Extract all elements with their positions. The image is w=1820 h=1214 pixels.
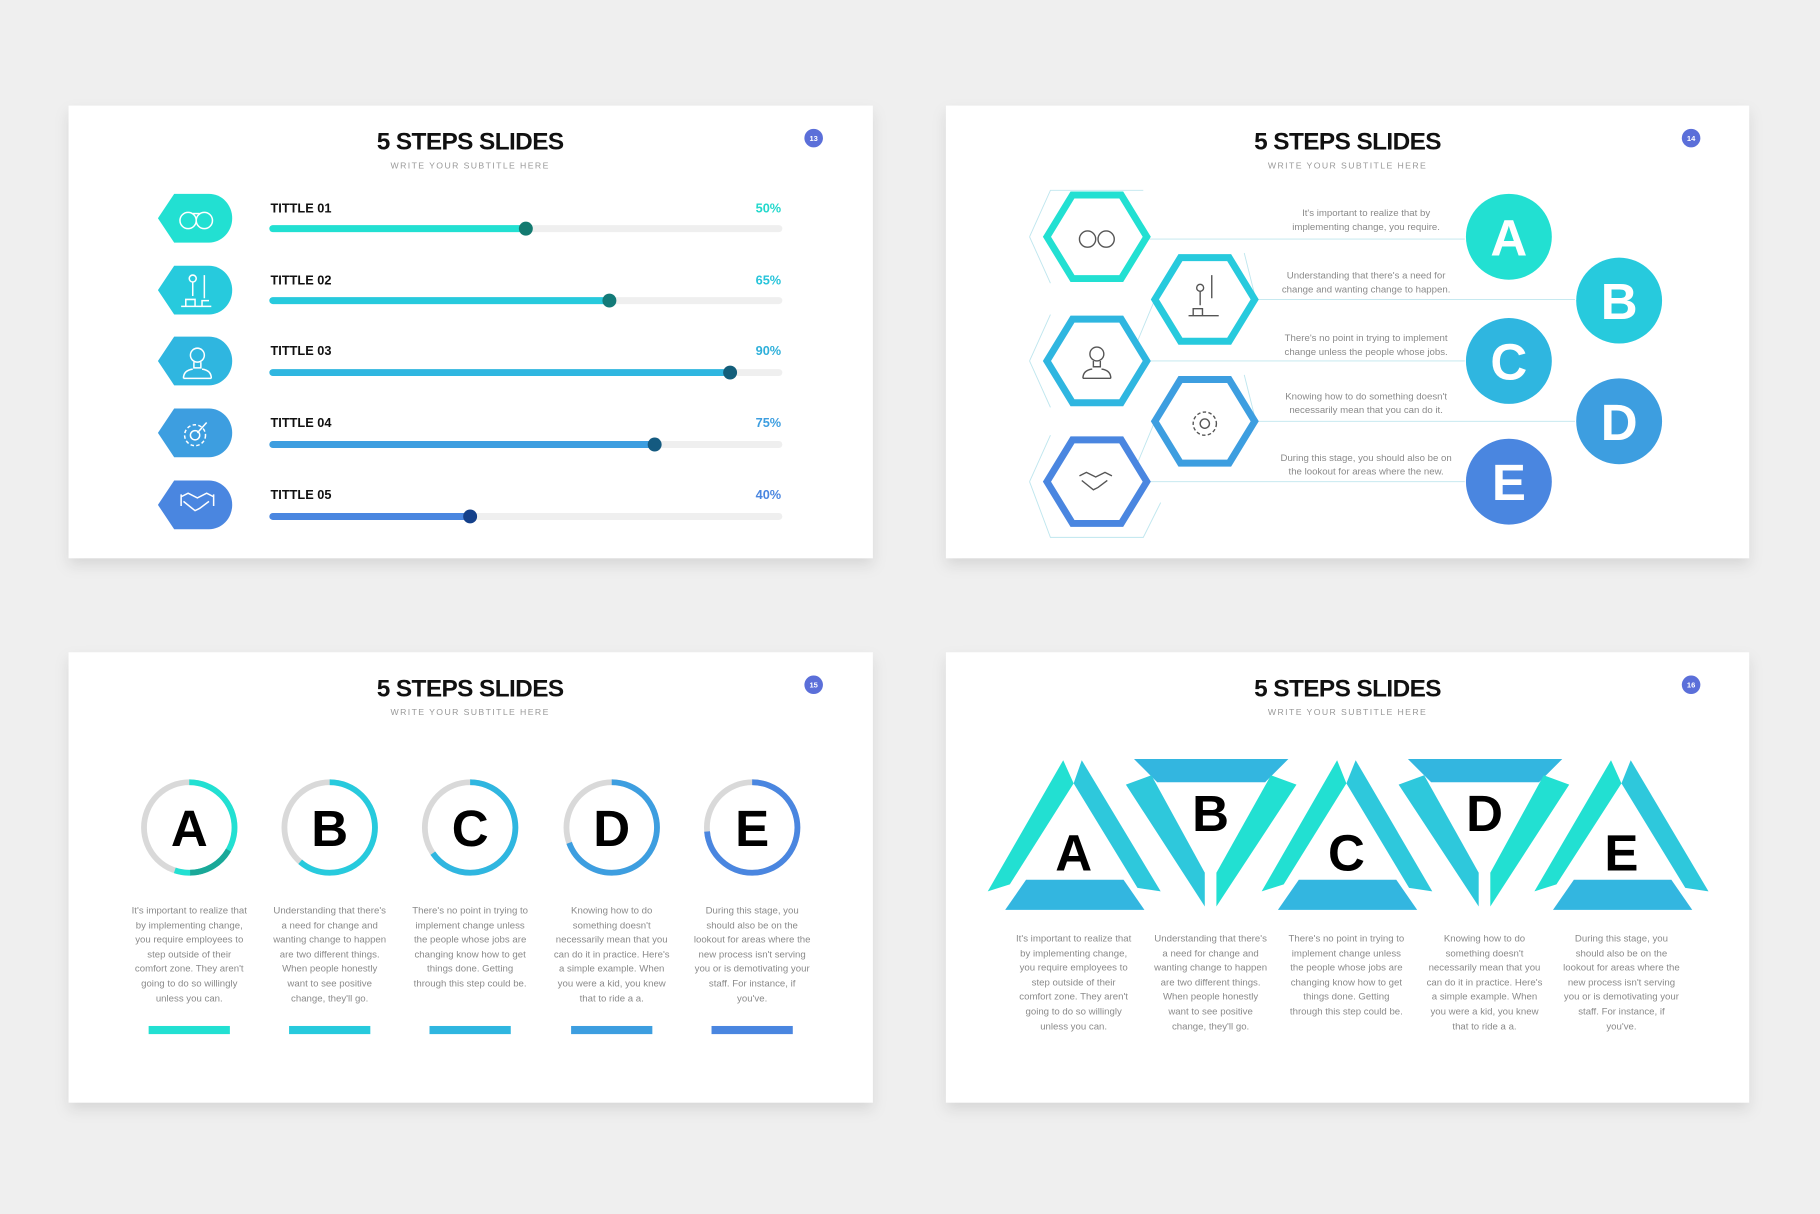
texts slide 15: changing know how to get bbox=[414, 950, 526, 961]
badge 14 bbox=[1682, 129, 1700, 147]
badge 15 bbox=[804, 675, 823, 694]
ring C: C bbox=[452, 800, 489, 857]
texts slide 15: a need for change and bbox=[282, 920, 378, 931]
row 2 bbox=[158, 266, 782, 315]
texts slide 16: going to do so willingly bbox=[1025, 1006, 1122, 1017]
texts slide 14: change unless the people whose jobs. bbox=[1285, 347, 1448, 358]
texts slide 15: you require employees to bbox=[135, 934, 243, 945]
texts slide 15: unless you can. bbox=[156, 994, 223, 1005]
texts slide 16: wanting change to happen bbox=[1153, 962, 1267, 973]
heading: slide 14: WRITE YOUR SUBTITLE HERE bbox=[1268, 160, 1427, 170]
heading: slide 16: 5 STEPS SLIDES bbox=[1254, 675, 1441, 702]
texts slide 15: When people honestly bbox=[282, 963, 378, 974]
triangle A bbox=[988, 760, 1161, 910]
texts slide 15: There's no point in trying to bbox=[412, 905, 528, 916]
row 2: TITTLE 02 bbox=[271, 272, 331, 287]
texts slide 14: necessarily mean that you can do it. bbox=[1289, 405, 1443, 416]
badge 14: 14 bbox=[1687, 134, 1696, 143]
texts slide 14: change and wanting change to happen. bbox=[1282, 284, 1450, 295]
texts slide 15: change, they'll go. bbox=[291, 994, 368, 1005]
row 1: 50% bbox=[756, 200, 781, 215]
texts slide 15: new process isn't serving bbox=[699, 950, 806, 961]
ring D bbox=[566, 782, 657, 873]
heading: slide 13 bbox=[377, 129, 564, 170]
triangle D: D bbox=[1466, 785, 1503, 842]
texts slide 16: things done. Getting bbox=[1303, 991, 1389, 1002]
texts slide 16: you require employees to bbox=[1020, 962, 1128, 973]
texts slide 16: that to ride a a. bbox=[1452, 1021, 1517, 1032]
texts slide 16: changing know how to get bbox=[1291, 977, 1402, 988]
badge 16 bbox=[1682, 675, 1700, 694]
hexagon D bbox=[1155, 380, 1255, 463]
texts slide 15: the people whose jobs are bbox=[414, 934, 526, 945]
ring E bbox=[707, 782, 797, 873]
texts slide 16: During this stage, you bbox=[1575, 933, 1668, 944]
texts slide 14 bbox=[1281, 208, 1452, 478]
texts slide 16: Understanding that there's bbox=[1154, 933, 1267, 944]
triangle A: A bbox=[1055, 824, 1092, 881]
texts slide 15: you were a kid, you knew bbox=[558, 979, 666, 990]
texts slide 14: There's no point in trying to implement bbox=[1285, 333, 1448, 344]
heading: slide 13: WRITE YOUR SUBTITLE HERE bbox=[391, 160, 550, 170]
texts slide 16 bbox=[1016, 933, 1680, 1032]
texts slide 16: want to see positive bbox=[1167, 1006, 1253, 1017]
row 2: 65% bbox=[756, 272, 781, 287]
row 3: 90% bbox=[756, 343, 781, 358]
texts slide 14: During this stage, you should also be on bbox=[1281, 453, 1452, 464]
letter circles: A bbox=[1490, 209, 1527, 266]
texts slide 15: want to see positive bbox=[286, 979, 372, 990]
triangle E: E bbox=[1604, 824, 1638, 881]
ring B bbox=[284, 782, 375, 873]
triangle B bbox=[1126, 759, 1296, 906]
texts slide 14: Understanding that there's a need for bbox=[1287, 271, 1446, 282]
texts slide 16: Knowing how to do bbox=[1444, 933, 1525, 944]
triangle E bbox=[1534, 760, 1709, 910]
texts slide 16: staff. For instance, if bbox=[1578, 1006, 1665, 1017]
texts slide 16: When people honestly bbox=[1163, 991, 1258, 1002]
heading: slide 15 bbox=[377, 675, 564, 717]
texts slide 16: necessarily mean that you bbox=[1429, 962, 1540, 973]
row 1 bbox=[158, 194, 782, 243]
texts slide 15: a simple example. When bbox=[559, 963, 664, 974]
texts slide 15: lookout for areas where the bbox=[694, 934, 810, 945]
texts slide 16: something doesn't bbox=[1446, 948, 1524, 959]
ring D: D bbox=[593, 800, 630, 857]
ring B: B bbox=[311, 800, 348, 857]
texts slide 15: through this step could be. bbox=[414, 979, 527, 990]
hexagon A bbox=[1047, 195, 1147, 279]
panel: slide 15 rings bbox=[69, 652, 873, 1103]
row 5: TITTLE 05 bbox=[271, 487, 331, 502]
texts slide 16: through this step could be. bbox=[1290, 1006, 1403, 1017]
triangle C bbox=[1262, 760, 1432, 910]
hexagon B bbox=[1155, 258, 1255, 341]
texts slide 15: going to do so willingly bbox=[141, 979, 238, 990]
ring A bbox=[127, 766, 251, 889]
ring C bbox=[425, 782, 515, 873]
hexagon E bbox=[1047, 440, 1147, 523]
ring A: A bbox=[171, 800, 208, 857]
texts slide 15: Understanding that there's bbox=[273, 905, 386, 916]
texts slide 16: by implementing change, bbox=[1020, 948, 1127, 959]
heading: slide 15: WRITE YOUR SUBTITLE HERE bbox=[391, 707, 550, 717]
color bars bbox=[149, 1026, 793, 1034]
texts slide 16: change, they'll go. bbox=[1172, 1021, 1249, 1032]
triangle B: B bbox=[1192, 785, 1229, 842]
texts slide 16: There's no point in trying to bbox=[1288, 933, 1404, 944]
connector lines bbox=[1030, 190, 1575, 537]
texts slide 15: should also be on the bbox=[706, 920, 798, 931]
texts slide 14: the lookout for areas where the new. bbox=[1289, 467, 1444, 478]
row 3 bbox=[158, 337, 782, 385]
panel: slide 13 progress bars bbox=[69, 106, 873, 558]
row 4: TITTLE 04 bbox=[271, 415, 332, 430]
badge 13: 13 bbox=[809, 134, 818, 143]
heading: slide 16: WRITE YOUR SUBTITLE HERE bbox=[1268, 707, 1427, 717]
texts slide 15: staff. For instance, if bbox=[709, 979, 796, 990]
texts slide 15: you or is demotivating your bbox=[695, 963, 810, 974]
texts slide 14: implementing change, you require. bbox=[1292, 222, 1440, 233]
row 5: 40% bbox=[756, 487, 781, 502]
row 3: TITTLE 03 bbox=[271, 343, 331, 358]
letter circles: D bbox=[1601, 394, 1638, 451]
row 4 bbox=[158, 409, 782, 457]
texts slide 15: are two different things. bbox=[280, 950, 380, 961]
texts slide 15: that to ride a a. bbox=[580, 994, 644, 1005]
texts slide 15: implement change unless bbox=[416, 920, 525, 931]
ring E: E bbox=[735, 800, 769, 857]
letter circles: B bbox=[1601, 273, 1638, 330]
texts slide 16: step outside of their bbox=[1032, 977, 1116, 988]
texts slide 15: things done. Getting bbox=[427, 963, 513, 974]
texts slide 16: a need for change and bbox=[1162, 948, 1259, 959]
texts slide 16: new process isn't serving bbox=[1568, 977, 1675, 988]
row 4: 75% bbox=[756, 415, 781, 430]
heading: slide 15: 5 STEPS SLIDES bbox=[377, 675, 564, 702]
texts slide 16: implement change unless bbox=[1292, 948, 1401, 959]
texts slide 16: lookout for areas where the bbox=[1563, 962, 1680, 973]
texts slide 14: Knowing how to do something doesn't bbox=[1285, 391, 1447, 402]
texts slide 16: It's important to realize that bbox=[1016, 933, 1132, 944]
letter circles: E bbox=[1492, 454, 1526, 511]
texts slide 15: necessarily mean that you bbox=[556, 934, 668, 945]
texts slide 16: comfort zone. They aren't bbox=[1019, 991, 1128, 1002]
panel: slide 14 hexagons bbox=[946, 106, 1749, 558]
heading: slide 13: 5 STEPS SLIDES bbox=[377, 129, 564, 156]
badge 16: 16 bbox=[1687, 681, 1695, 690]
texts slide 16: are two different things. bbox=[1161, 977, 1261, 988]
row 1: TITTLE 01 bbox=[271, 200, 331, 215]
texts slide 15: wanting change to happen bbox=[272, 934, 386, 945]
heading: slide 14 bbox=[1254, 129, 1441, 170]
texts slide 16: you or is demotivating your bbox=[1564, 991, 1680, 1002]
texts slide 15: It's important to realize that bbox=[132, 905, 247, 916]
texts slide 16: can do it in practice. Here's bbox=[1427, 977, 1543, 988]
triangle C: C bbox=[1328, 824, 1365, 881]
texts slide 16: a simple example. When bbox=[1432, 991, 1537, 1002]
texts slide 14: It's important to realize that by bbox=[1302, 208, 1430, 219]
badge 15: 15 bbox=[809, 681, 818, 690]
letter circles: C bbox=[1490, 334, 1527, 391]
texts slide 15: you've. bbox=[737, 994, 767, 1005]
heading: slide 14: 5 STEPS SLIDES bbox=[1254, 129, 1441, 156]
texts slide 15: by implementing change, bbox=[136, 920, 243, 931]
texts slide 16: the people whose jobs are bbox=[1290, 962, 1403, 973]
heading: slide 16 bbox=[1254, 675, 1441, 717]
texts slide 15: something doesn't bbox=[573, 920, 651, 931]
texts slide 15: step outside of their bbox=[147, 950, 232, 961]
texts slide 16: you've. bbox=[1606, 1021, 1637, 1032]
letter circles bbox=[1466, 194, 1662, 525]
texts slide 15: can do it in practice. Here's bbox=[554, 950, 670, 961]
texts slide 15: comfort zone. They aren't bbox=[135, 963, 244, 974]
badge 13 bbox=[804, 129, 823, 147]
texts slide 15: During this stage, you bbox=[706, 905, 799, 916]
texts slide 16: should also be on the bbox=[1576, 948, 1667, 959]
row 5 bbox=[158, 480, 782, 529]
panel: slide 16 triangles bbox=[946, 652, 1749, 1103]
texts slide 16: unless you can. bbox=[1040, 1021, 1107, 1032]
triangle D bbox=[1399, 759, 1569, 906]
hexagon C bbox=[1047, 319, 1147, 403]
texts slide 15 bbox=[132, 905, 810, 1005]
texts slide 15: Knowing how to do bbox=[571, 905, 652, 916]
texts slide 16: you were a kid, you knew bbox=[1430, 1006, 1539, 1017]
